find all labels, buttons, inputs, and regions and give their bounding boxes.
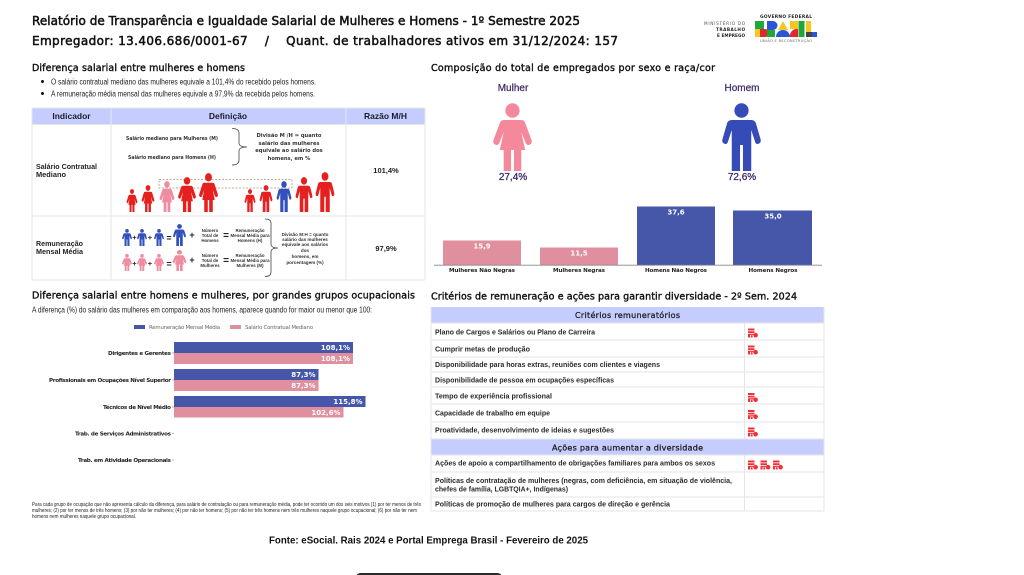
formula: women mean pay: Mulheres (M) — [236, 263, 264, 268]
formula: men mean pay: + — [132, 233, 137, 242]
bar chart: sex and race composition — [434, 206, 822, 274]
heading: criteria: Critérios de remuneração e ações para garantir diversidade - 2º Sem. 2024 — [431, 292, 797, 302]
criteria rows: Tempo de experiência profissional — [435, 394, 552, 400]
section header: criteria — [431, 307, 824, 323]
formula: men mean pay: + — [189, 230, 195, 240]
bullet list — [41, 78, 316, 98]
criteria rows: chefes de família, LGBTQIA+, Indígenas) — [435, 486, 568, 494]
formula: women mean pay: = — [166, 259, 172, 269]
icon: woman — [493, 103, 532, 171]
logo: government of Brazil: MINISTÉRIO DO — [704, 21, 746, 26]
legend: Remuneração Mensal Média — [149, 324, 220, 331]
definition text: mean pay ratio: salário das mulheres — [282, 237, 328, 242]
definition text: mean pay ratio: Divisão M:H = quanto — [282, 232, 329, 237]
table header: Indicador — [52, 111, 91, 121]
criteria rows: Cumprir metas de produção — [435, 346, 530, 354]
bar chart: sex and race composition: 35,0 — [764, 212, 782, 220]
definition text: median salaries — [126, 128, 323, 165]
panel: man share — [722, 83, 761, 183]
criteria rows: Políticas de contratação de mulheres (negras, com deficiência, em situação de violência, — [435, 478, 732, 485]
bar chart: occupational groups: Técnicos de Nível Médio — [103, 404, 171, 411]
bar chart: occupational groups: Profissionais em Ocupações Nível Superior — [49, 377, 171, 384]
table header: Definição — [209, 111, 247, 121]
definition text: median salaries: Salário mediano para Mulheres (M) — [126, 135, 218, 142]
title — [32, 14, 618, 48]
bar chart: occupational groups: 87,3% — [291, 382, 316, 390]
formula: men mean pay: Homens — [201, 238, 219, 243]
definition text: mean pay ratio: dos — [301, 248, 310, 253]
table header: Razão M/H — [364, 111, 407, 121]
bar chart: sex and race composition: 37,6 — [667, 208, 685, 216]
formula: women mean pay: + — [189, 255, 195, 265]
criteria rows: Disponibilidade de pessoa em ocupações específicas — [435, 378, 614, 384]
formula: men mean pay: Homens (H) — [238, 238, 263, 243]
formula: men mean pay: + — [148, 233, 153, 242]
formula: women mean pay: + — [132, 259, 137, 268]
formula: women mean pay: = — [223, 256, 229, 266]
heading: composition: Composição do total de empregados por sexo e raça/cor — [431, 63, 715, 74]
icon: man — [722, 103, 761, 171]
formula: men mean pay: Mensal Média para — [230, 233, 270, 238]
panel: man share: 72,6% — [728, 172, 756, 183]
formula: men mean pay: = — [166, 233, 172, 243]
title: Relatório de Transparência e Igualdade Salarial de Mulheres e Homens - 1º Semestre 2025 — [32, 14, 580, 28]
text: chart description: A diferença (%) do salário das mulheres em comparação aos homens, aparece quando for maior ou menor que 100: — [32, 306, 372, 314]
bar chart: occupational groups: 115,8% — [333, 398, 362, 406]
table header — [32, 108, 425, 280]
bar chart: occupational groups: 108,1% — [321, 344, 350, 352]
criteria rows: Ações de apoio a compartilhamento de obrigações familiares para ambos os sexos — [435, 460, 715, 468]
formula: men mean pay: Número — [202, 228, 219, 233]
bar chart: sex and race composition: Mulheres Não Negras — [449, 268, 516, 274]
bullet list: O salário contratual mediano das mulheres equivale a 101,4% do recebido pelos homens. — [51, 78, 316, 86]
title: Empregador: 13.406.686/0001-67 / Quant. de trabalhadores ativos em 31/12/2024: 157 — [32, 34, 618, 48]
bar chart: occupational groups: Trab. em Atividade Operacionais — [78, 458, 172, 464]
section header: diversity actions: Ações para aumentar a diversidade — [552, 444, 703, 452]
value: mean pay ratio: 97,9% — [375, 244, 397, 253]
formula: men mean pay: Remuneração — [235, 228, 265, 233]
panel: woman share: 27,4% — [499, 172, 527, 183]
definition text: mean pay ratio: homens, em — [292, 254, 318, 259]
definition text: median salaries: homens, em % — [268, 156, 311, 162]
row label: mean pay — [36, 239, 84, 256]
criteria rows: Proatividade, desenvolvimento de ideias e sugestões — [435, 428, 614, 434]
formula: women mean pay: Remuneração — [235, 253, 265, 258]
formula: men mean pay: = — [223, 230, 229, 242]
section header: criteria: Critérios remuneratórios — [575, 310, 680, 320]
bar chart: occupational groups: Dirigentes e Gerentes — [108, 351, 172, 357]
logo: government of Brazil: TRABALHO — [716, 27, 745, 32]
row label: mean pay: Mensal Média — [36, 247, 84, 256]
bar chart: sex and race composition: 15,9 — [473, 242, 491, 250]
footnote — [32, 502, 421, 520]
row label: contractual salary — [36, 162, 97, 179]
bar chart: sex and race composition: 11,5 — [570, 250, 588, 258]
section header: diversity actions — [431, 439, 824, 455]
criteria rows: Plano de Cargos e Salários ou Plano de Carreira — [435, 330, 595, 336]
row label: contractual salary: Mediano — [36, 170, 66, 179]
panel: woman share: Mulher — [498, 83, 529, 94]
source note: Fonte: eSocial. Rais 2024 e Portal Emprega Brasil - Fevereiro de 2025 — [269, 536, 588, 546]
definition text: mean pay ratio — [265, 219, 329, 276]
panel: woman share — [493, 83, 532, 183]
bar chart: occupational groups — [49, 342, 366, 464]
definition text: median salaries: equivale ao salário dos — [255, 147, 323, 154]
bar chart: occupational groups: 108,1% — [321, 355, 350, 363]
heading: salary difference: Diferença salarial entre mulheres e homens — [32, 63, 245, 74]
panel: indicator table — [32, 108, 425, 280]
bullet list: A remuneração média mensal das mulheres equivale a 97,9% da recebida pelos homens. — [51, 90, 315, 98]
definition text: mean pay ratio: equivale aos salários — [282, 242, 329, 247]
formula: women mean pay: Mulheres — [200, 263, 220, 268]
panel: criteria table — [431, 307, 824, 511]
legend — [134, 324, 313, 331]
bar chart: occupational groups: 102,6% — [311, 409, 340, 417]
icons: red markers — [748, 328, 783, 470]
formula: women mean pay: Mensal Média para — [230, 258, 270, 263]
value: contractual ratio: 101,4% — [373, 166, 399, 175]
definition text: median salaries: Divisão M /H = quanto — [256, 133, 322, 139]
definition text: median salaries: Salário mediano para Homens (H) — [128, 154, 216, 161]
formula: men mean pay — [122, 224, 270, 246]
bar chart: occupational groups: Trab. de Serviços Administrativos — [75, 432, 172, 438]
row label: contractual salary: Salário Contratual — [36, 162, 97, 171]
bottom dark tab — [356, 573, 502, 575]
definition text: median salaries: salário das mulheres — [259, 140, 319, 147]
criteria rows: Disponibilidade para horas extras, reuniões com clientes e viagens — [435, 362, 660, 369]
footnote: homens nem mulheres naquele grupo ocupacional. — [32, 514, 136, 520]
criteria rows — [435, 330, 732, 508]
footnote: Para cada grupo de ocupação que não apresenta cálculo da diferença, para salário de contratação ou para remuneração média, pode ter ocorrido um dos seis motivos (1) por ter menos de três — [32, 502, 421, 508]
criteria rows: Capacidade de trabalho em equipe — [435, 410, 550, 418]
formula: women mean pay — [122, 250, 270, 271]
icons: median people lineup — [127, 172, 334, 212]
bar chart: sex and race composition: Homens Negros — [748, 268, 798, 274]
footnote: mulheres; (2) por ter menos de três homens; (3) por não ter mulheres; (4) por não ter homens; (5) por não ter três homens nem três mulheres naquele grupo ocupacional; (6) por não ter nem — [32, 508, 417, 514]
logo: government of Brazil: E EMPREGO — [717, 33, 745, 38]
bar chart: occupational groups: 87,3% — [291, 371, 316, 379]
logo: government of Brazil: UNIÃO E RECONSTRUÇÃO — [760, 38, 812, 43]
bar chart: sex and race composition: Homens Não Negros — [645, 268, 708, 274]
definition text: mean pay ratio: porcentagem (%) — [286, 260, 324, 265]
formula: men mean pay: Total de — [202, 233, 219, 238]
row label: mean pay: Remuneração — [36, 239, 83, 248]
formula: women mean pay: Total de — [202, 258, 219, 263]
bar chart: sex and race composition: Mulheres Negras — [553, 268, 606, 274]
logo: government of Brazil: GOVERNO FEDERAL — [760, 14, 812, 20]
formula: women mean pay: Número — [202, 253, 219, 258]
logo: government of Brazil — [704, 14, 817, 43]
panel: man share: Homem — [724, 83, 760, 94]
legend: Salário Contratual Mediano — [245, 324, 313, 331]
heading: occupational groups: Diferença salarial entre homens e mulheres, por grandes grupos ocupacionais — [32, 290, 415, 302]
criteria rows: Políticas de promoção de mulheres para cargos de direção e gerência — [435, 502, 670, 508]
formula: women mean pay: + — [148, 259, 153, 268]
